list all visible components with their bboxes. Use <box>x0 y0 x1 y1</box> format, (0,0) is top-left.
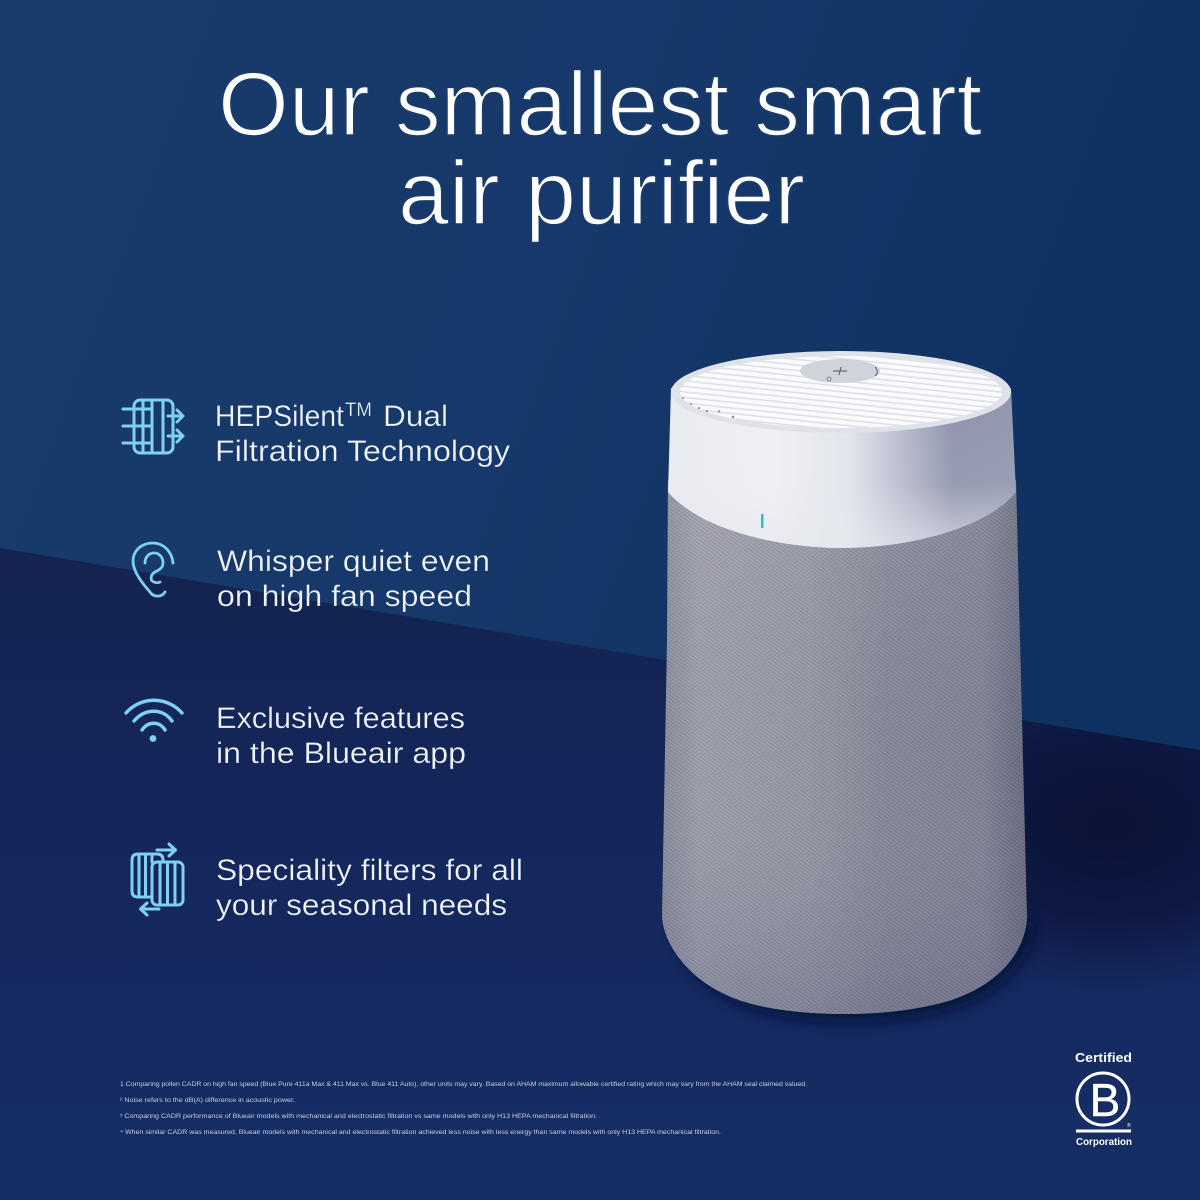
product shadow <box>670 660 1200 1023</box>
icon: ear <box>133 543 173 596</box>
feature text: TM <box>345 400 372 421</box>
background floor <box>0 548 1200 1200</box>
feature text <box>215 400 510 468</box>
top rim <box>671 351 1011 433</box>
feature text <box>217 545 490 613</box>
logo: Certified B Corporation: B <box>1090 1074 1120 1126</box>
status light <box>761 514 764 528</box>
top vent grille <box>680 356 1002 428</box>
feature text: Whisper quiet even <box>217 545 490 578</box>
feature text: HEPSilent <box>215 400 345 433</box>
white top housing <box>668 388 1016 548</box>
feature: HEPSilent dual filtration <box>123 400 510 468</box>
logo: Certified B Corporation: Corporation <box>1076 1136 1132 1148</box>
feature text <box>216 702 466 770</box>
logo: Certified B Corporation <box>1075 1051 1132 1148</box>
control dial <box>800 359 880 383</box>
footnotes: ² Noise refers to the dB(A) difference in acoustic power. <box>120 1097 295 1104</box>
indicator dots <box>682 397 734 418</box>
background wall <box>0 0 1200 800</box>
footnotes: ⁴ When similar CADR was measured, Blueair models with mechanical and electrostatic filtration achieved less noise with less energy than same models with only H13 HEPA mechanical filtration. <box>120 1129 721 1136</box>
fabric lower body <box>662 480 1027 1014</box>
icon: wifi <box>126 700 182 742</box>
feature: speciality filters <box>132 844 523 922</box>
title <box>218 55 982 244</box>
icon: filter with arrows <box>123 400 183 453</box>
feature text: Speciality filters for all <box>216 854 523 887</box>
title: Our smallest smart <box>218 55 982 155</box>
product: air purifier <box>662 345 1027 1014</box>
feature text: on high fan speed <box>217 580 472 613</box>
feature: whisper quiet <box>133 543 490 613</box>
feature text: Exclusive features <box>216 702 465 735</box>
feature text <box>216 854 523 922</box>
feature: app <box>126 700 466 770</box>
footnotes: 1 Comparing pollen CADR on high fan speed (Blue Pure 411a Max & 411 Max vs. Blue 411 Auto), other units may vary. Based on AHAM maximum allowable certified rating which may vary from the AHAM seal claimed valued. <box>120 1081 807 1088</box>
title: air purifier <box>398 144 805 244</box>
footnotes: ³ Comparing CADR performance of Blueair models with mechanical and electrostatic filtration vs same models with only H13 HEPA mechanical filtration. <box>120 1113 597 1120</box>
logo: Certified B Corporation: ® <box>1127 1122 1131 1129</box>
feature text: your seasonal needs <box>216 889 507 922</box>
icon: swapping filters <box>132 844 183 915</box>
logo: Certified B Corporation: Certified <box>1075 1051 1132 1065</box>
feature text: Dual <box>383 400 448 433</box>
footnotes <box>120 1081 807 1136</box>
feature text: Filtration Technology <box>215 435 510 468</box>
feature text: in the Blueair app <box>216 737 466 770</box>
